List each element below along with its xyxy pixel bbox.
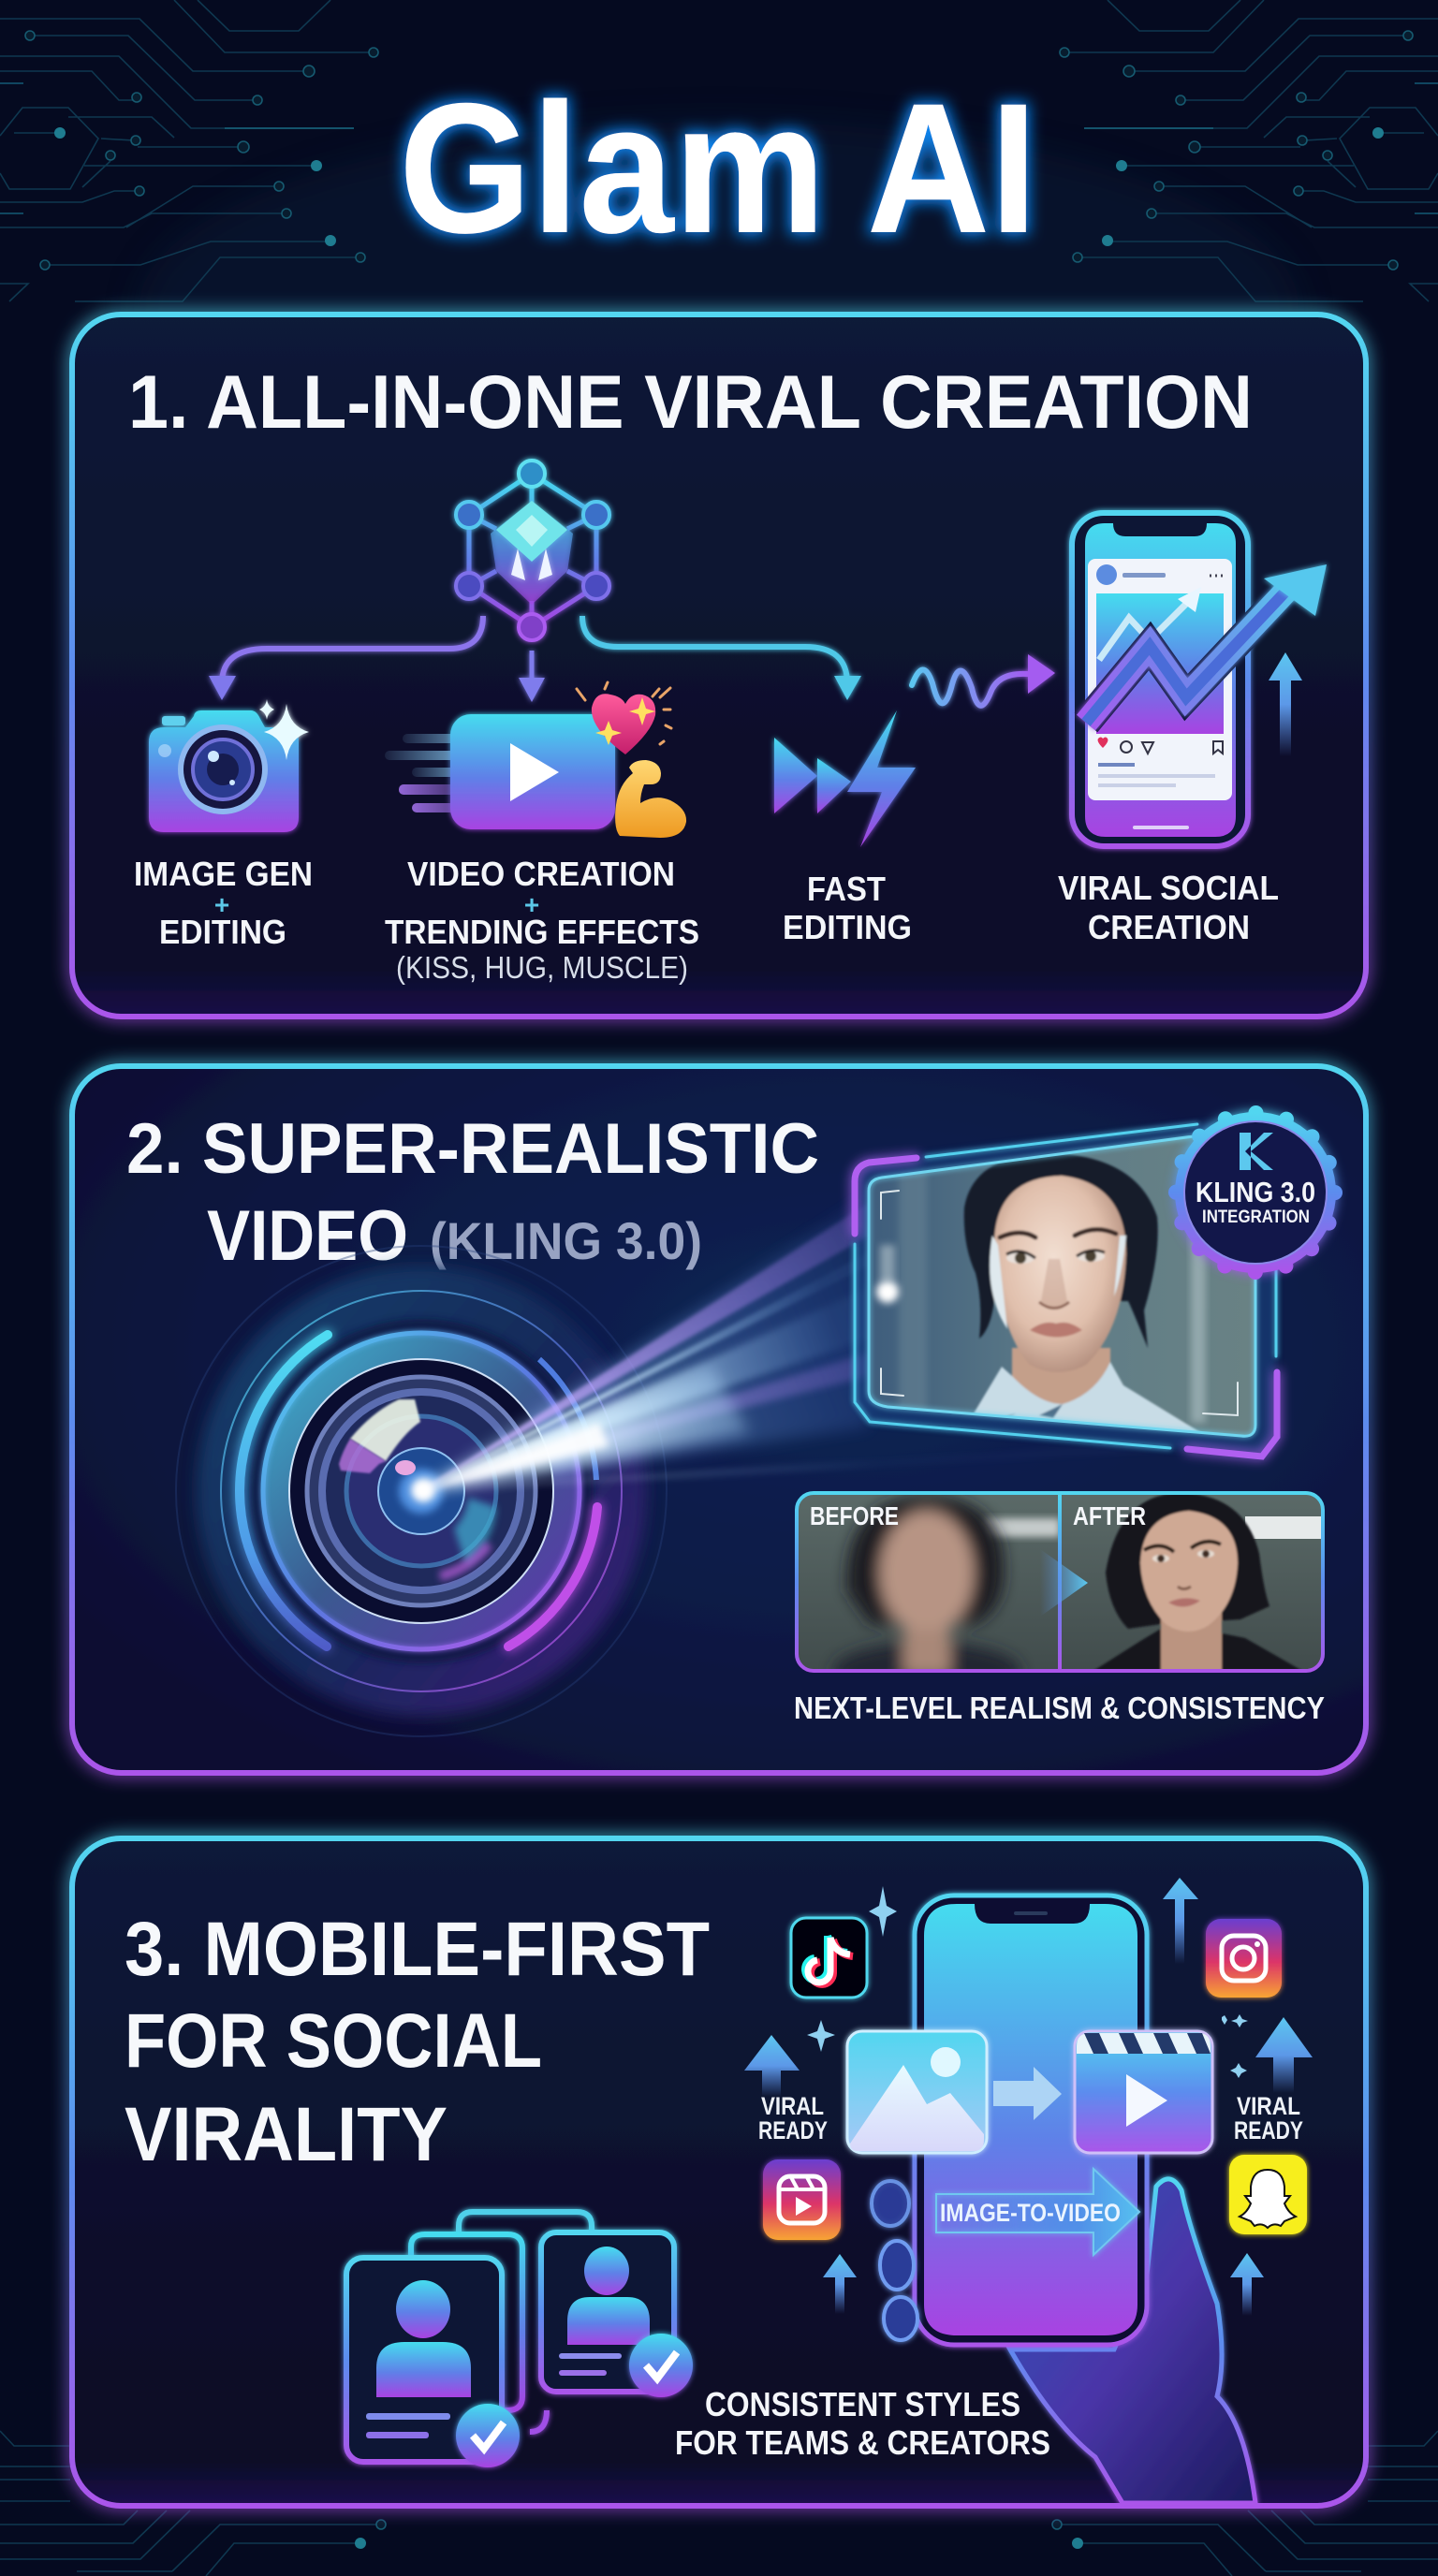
icon: fingers bbox=[872, 2181, 917, 2340]
arrow: to fast editing bbox=[582, 616, 861, 700]
label: viral ready left: VIRAL bbox=[761, 2092, 824, 2120]
panel: mobile-first for social virality bbox=[72, 1838, 1366, 2506]
label: viral social creation bbox=[1058, 869, 1279, 946]
caption: realism and consistency: NEXT-LEVEL REALISM & CONSISTENCY bbox=[794, 1690, 1325, 1725]
heading 3: 3. MOBILE-FIRST bbox=[125, 1907, 710, 1992]
icon: camera bbox=[149, 699, 309, 832]
heading 3 bbox=[125, 1907, 710, 2177]
label: viral ready right bbox=[1234, 2092, 1303, 2144]
arrow: to video creation bbox=[519, 651, 545, 702]
label: fast editing: FAST bbox=[807, 870, 886, 908]
badge: Kling 3.0 integration: INTEGRATION bbox=[1202, 1208, 1310, 1227]
portrait frame bbox=[855, 1123, 1277, 1456]
label: video creation: (KISS, HUG, MUSCLE) bbox=[396, 950, 688, 985]
camera lens bbox=[176, 1246, 667, 1736]
frame corners and neon lines bbox=[855, 1124, 1277, 1456]
heading 3: FOR SOCIAL bbox=[125, 1998, 542, 2084]
label: image gen bbox=[134, 855, 313, 951]
badge: Kling 3.0 integration: KLING 3.0 bbox=[1196, 1176, 1315, 1208]
heading 2: 2. SUPER-REALISTIC bbox=[126, 1109, 819, 1189]
caption: consistent styles: FOR TEAMS & CREATORS bbox=[675, 2423, 1050, 2462]
title: Glam AI bbox=[399, 65, 1037, 271]
sparkles bbox=[807, 1886, 1248, 2078]
label: viral social creation: CREATION bbox=[1088, 908, 1250, 946]
icon: Reels bbox=[763, 2159, 841, 2240]
label: image gen: IMAGE GEN bbox=[134, 855, 313, 893]
arrow: image to clapper bbox=[993, 2067, 1062, 2120]
icon: phone bbox=[915, 1895, 1147, 2345]
before and after comparison bbox=[795, 1491, 1325, 1673]
label: image-to-video: IMAGE-TO-VIDEO bbox=[940, 2199, 1121, 2227]
portrait photo bbox=[871, 1138, 1255, 1435]
icon: heart with sparkles bbox=[577, 682, 671, 754]
icon: person cards stack bbox=[346, 2212, 693, 2467]
heading 2: VIDEO bbox=[207, 1196, 408, 1276]
before and after labels bbox=[810, 1501, 1146, 1530]
label: fast editing: EDITING bbox=[783, 908, 912, 946]
icon: Snapchat bbox=[1229, 2155, 1307, 2234]
icon: AI network cube bbox=[456, 461, 609, 640]
comparison border bbox=[797, 1493, 1323, 1671]
before and after labels: AFTER bbox=[1073, 1501, 1146, 1530]
panel frame bbox=[72, 1066, 1366, 1773]
label: video creation: VIDEO CREATION bbox=[407, 855, 675, 893]
label: image gen: EDITING bbox=[159, 913, 286, 951]
label: video creation: TRENDING EFFECTS bbox=[385, 913, 699, 951]
icon: viral growth arrow bbox=[1086, 564, 1327, 756]
badge: Kling 3.0 integration bbox=[1175, 1112, 1336, 1273]
arrow: wave bbox=[912, 654, 1055, 706]
label: viral social creation: VIRAL SOCIAL bbox=[1058, 869, 1279, 907]
icon: hand bbox=[1010, 2179, 1255, 2503]
arrow: before to after bbox=[1040, 1549, 1088, 1617]
icon: Instagram bbox=[1206, 1919, 1282, 1998]
before and after labels: BEFORE bbox=[810, 1501, 899, 1530]
label: viral ready right: READY bbox=[1234, 2116, 1303, 2144]
icon: muscle arm bbox=[615, 760, 686, 838]
panel frame bbox=[72, 1838, 1366, 2506]
light beam bbox=[411, 1196, 1170, 1502]
label: viral ready right: VIRAL bbox=[1237, 2092, 1300, 2120]
heading 2: (KLING 3.0) bbox=[430, 1211, 702, 1270]
arrow: to image gen bbox=[209, 616, 483, 700]
label: video creation: + bbox=[524, 890, 539, 919]
heading 2 bbox=[126, 1109, 819, 1276]
icon: clapper video card bbox=[1075, 2031, 1212, 2153]
panel: super-realistic video bbox=[72, 1066, 1366, 1773]
label: image gen: + bbox=[214, 890, 229, 919]
icon: TikTok bbox=[791, 1918, 867, 1998]
icon: video play card with speed lines bbox=[385, 714, 615, 829]
caption: consistent styles bbox=[675, 2385, 1050, 2462]
before photo bbox=[799, 1495, 1058, 1669]
after photo bbox=[1060, 1493, 1325, 1676]
icon: fast forward and lightning bbox=[774, 710, 916, 847]
label: viral ready left: READY bbox=[758, 2116, 828, 2144]
panel: all-in-one viral creation bbox=[72, 315, 1366, 1017]
arrows: upward viral bbox=[744, 1878, 1313, 2316]
label: fast editing bbox=[783, 870, 912, 946]
caption: consistent styles: CONSISTENT STYLES bbox=[705, 2385, 1020, 2423]
arrow: image-to-video bbox=[936, 2169, 1139, 2255]
label: viral ready left bbox=[758, 2092, 828, 2144]
heading 1: 1. ALL-IN-ONE VIRAL CREATION bbox=[128, 360, 1253, 445]
heading 3: VIRALITY bbox=[125, 2092, 448, 2177]
label: video creation bbox=[385, 855, 699, 985]
icon: image card bbox=[847, 2031, 987, 2153]
panel frame bbox=[72, 315, 1366, 1017]
icon: phone with viral post bbox=[1072, 513, 1248, 846]
